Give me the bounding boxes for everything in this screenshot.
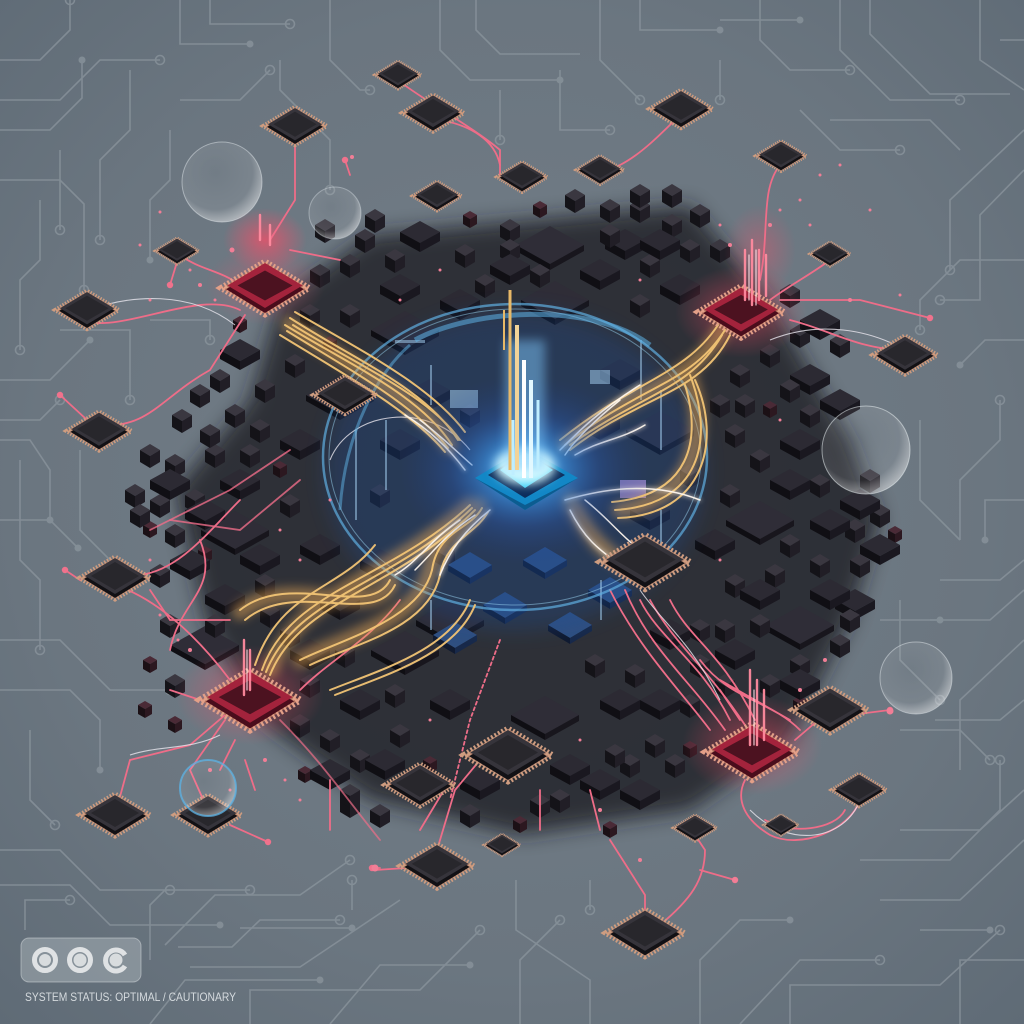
inner dome detail lights xyxy=(355,340,662,630)
gold energy ribbons xyxy=(240,312,730,695)
red hub chips xyxy=(200,262,798,780)
status icon: cautionary xyxy=(106,950,125,971)
white traces xyxy=(90,299,905,835)
status icon: optimal xyxy=(70,950,90,970)
outer microchips xyxy=(56,61,937,957)
red glows at chips xyxy=(176,205,822,795)
blue dome tint xyxy=(325,310,705,630)
central blue processor chip xyxy=(400,375,650,565)
vertical light beam xyxy=(504,290,545,478)
status icon: optimal xyxy=(34,950,56,970)
status caption: SYSTEM STATUS: OPTIMAL / CAUTIONARY xyxy=(25,990,236,1004)
pink traces to outer chips xyxy=(60,80,930,925)
dark component city xyxy=(125,184,902,838)
sparks and particles xyxy=(138,155,902,883)
pink light beams on hub chips xyxy=(244,215,766,745)
blue energy dome xyxy=(323,304,707,610)
dark circuit city base xyxy=(175,205,880,835)
status legend panel xyxy=(21,938,141,982)
translucent bubbles xyxy=(180,142,952,816)
